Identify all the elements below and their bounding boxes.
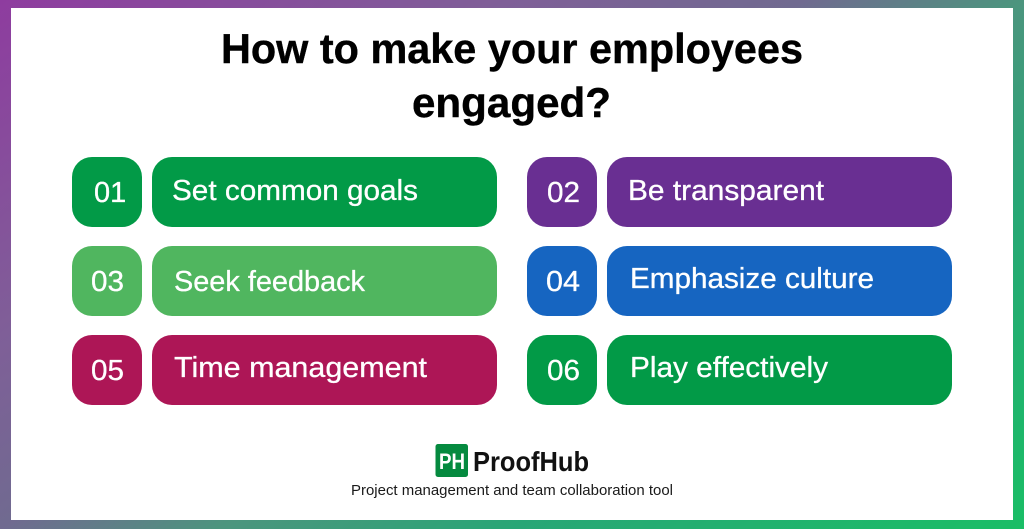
item 04: emphasize culture — [527, 246, 952, 316]
title — [221, 25, 803, 126]
tagline: Project management and team collaboration tool — [351, 483, 673, 499]
item 06: play effectively: Play effectively — [630, 352, 829, 384]
item 05: time management — [72, 335, 497, 405]
title: engaged? — [412, 79, 611, 126]
item 04: emphasize culture: Emphasize culture — [630, 263, 874, 295]
title: How to make your employees — [221, 25, 803, 72]
item 04: emphasize culture: 04 — [546, 266, 580, 298]
item 05: time management: 05 — [91, 355, 124, 387]
item 03: seek feedback — [72, 246, 497, 316]
item 02: be transparent: Be transparent — [628, 175, 824, 207]
item 02: be transparent: 02 — [547, 177, 580, 209]
proofhub logo — [436, 444, 589, 477]
icon: PH badge: PH — [439, 449, 465, 474]
proofhub logo: ProofHub — [473, 446, 589, 477]
item 02: be transparent — [527, 157, 952, 227]
item 01: set common goals: Set common goals — [172, 175, 418, 207]
item 03: seek feedback: 03 — [91, 266, 124, 298]
item 05: time management: Time management — [174, 352, 427, 384]
item 03: seek feedback: Seek feedback — [174, 266, 365, 298]
item 01: set common goals — [72, 157, 497, 227]
item 01: set common goals: 01 — [94, 177, 126, 209]
item 06: play effectively: 06 — [547, 355, 580, 387]
item 06: play effectively — [527, 335, 952, 405]
icon: PH badge — [436, 444, 468, 477]
